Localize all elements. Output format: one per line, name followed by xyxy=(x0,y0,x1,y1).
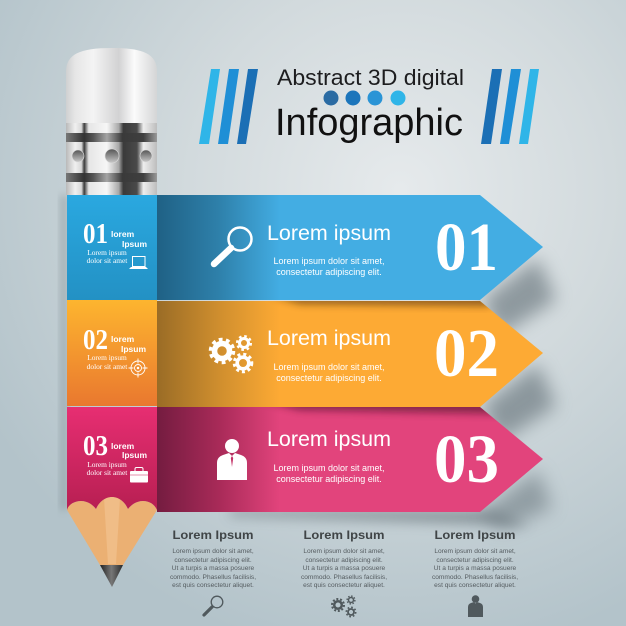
column 3 xyxy=(432,530,518,617)
label xyxy=(111,229,147,249)
label: Ipsum xyxy=(122,239,147,249)
icon: target xyxy=(128,358,148,378)
label: Ipsum xyxy=(121,344,146,354)
title line 2: Infographic xyxy=(275,102,463,144)
caption: dolor sit amet xyxy=(87,362,128,371)
pencil xyxy=(66,48,157,587)
column 3 heading: Lorem Ipsum xyxy=(434,530,516,542)
column 2 text: Ut a turpis a massa posuere xyxy=(303,565,386,572)
text 03: consectetur adipiscing elit. xyxy=(276,474,382,484)
column 1 heading: Lorem Ipsum xyxy=(172,530,254,542)
number: 02 xyxy=(83,325,108,356)
caption: Lorem ipsum xyxy=(87,248,127,257)
title block xyxy=(199,65,539,144)
label xyxy=(111,441,147,460)
caption xyxy=(87,460,128,477)
column 1 xyxy=(170,530,256,615)
number 02: 02 xyxy=(434,315,499,391)
title dots xyxy=(324,90,406,106)
column 3 text: est quis consectetur aliquet. xyxy=(434,582,516,589)
text 03 xyxy=(273,463,385,484)
heading 02: Lorem ipsum xyxy=(267,327,391,350)
text 02 xyxy=(273,362,385,383)
column 1 text: commodo. Phasellus facilisis, xyxy=(170,574,256,581)
title line 1: Abstract 3D digital xyxy=(277,65,464,90)
column 1 text: est quis consectetur aliquet. xyxy=(172,582,254,589)
column 1 text: Ut a turpis a massa posuere xyxy=(172,565,255,572)
title stripes right xyxy=(481,69,539,144)
column 2 heading: Lorem Ipsum xyxy=(304,530,384,542)
icon: magnifier small xyxy=(204,596,223,615)
panel: ribbon 03 xyxy=(157,400,543,512)
label: lorem xyxy=(111,441,135,451)
caption xyxy=(87,353,128,371)
pencil section 01 xyxy=(67,195,157,300)
number 01: 01 xyxy=(435,209,498,285)
icon: briefcase xyxy=(130,468,148,482)
icon: laptop xyxy=(129,256,148,269)
column 1 text xyxy=(170,548,256,589)
number: 03 xyxy=(83,431,108,462)
text 02: Lorem ipsum dolor sit amet, xyxy=(273,362,385,372)
column 3 text xyxy=(432,548,518,589)
text 01: Lorem ipsum dolor sit amet, xyxy=(273,256,385,266)
column 1 text: consectetur adipiscing elit. xyxy=(174,557,252,564)
icon: gears xyxy=(210,336,252,372)
label: Ipsum xyxy=(122,450,147,460)
column 3 text: Ut a turpis a massa posuere xyxy=(434,565,517,572)
text 01: consectetur adipiscing elit. xyxy=(276,267,382,277)
column 1 text: Lorem ipsum dolor sit amet, xyxy=(172,548,254,555)
eraser xyxy=(66,48,157,123)
column 2 text: est quis consectetur aliquet. xyxy=(303,582,385,589)
metal ferrule xyxy=(66,123,157,195)
column 2 text: Lorem ipsum dolor sit amet, xyxy=(303,548,385,555)
column 2 text: consectetur adipiscing elit. xyxy=(305,557,383,564)
column 3 text: consectetur adipiscing elit. xyxy=(436,557,514,564)
column 3 text: commodo. Phasellus facilisis, xyxy=(432,574,518,581)
caption: Lorem ipsum xyxy=(87,353,127,362)
number 03: 03 xyxy=(434,421,499,497)
number: 01 xyxy=(83,219,108,250)
caption: dolor sit amet xyxy=(87,468,128,477)
icon: person small xyxy=(468,595,483,617)
text 02: consectetur adipiscing elit. xyxy=(276,373,382,383)
arrow shadows xyxy=(60,195,556,530)
label: lorem xyxy=(111,229,135,239)
pencil section 03 xyxy=(67,407,157,510)
icon: gears small xyxy=(332,596,356,617)
panel: ribbon 02 xyxy=(157,295,543,407)
heading 01: Lorem ipsum xyxy=(267,222,391,245)
title stripes left xyxy=(199,69,258,144)
pencil tip xyxy=(67,496,157,587)
caption: Lorem ipsum xyxy=(87,460,127,469)
column 2 xyxy=(301,530,387,617)
text 01 xyxy=(273,256,385,277)
column 2 text xyxy=(301,548,387,589)
heading 03: Lorem ipsum xyxy=(267,428,391,451)
caption: dolor sit amet xyxy=(87,256,128,265)
label xyxy=(111,334,146,354)
panel: ribbon 01 xyxy=(157,195,543,300)
icon: magnifier xyxy=(214,228,252,264)
column 2 text: commodo. Phasellus facilisis, xyxy=(301,574,387,581)
label: lorem xyxy=(111,334,135,344)
icon: person xyxy=(217,439,247,480)
column 3 text: Lorem ipsum dolor sit amet, xyxy=(434,548,516,555)
text 03: Lorem ipsum dolor sit amet, xyxy=(273,463,385,473)
pencil section 02 xyxy=(67,300,157,406)
caption xyxy=(87,248,128,265)
